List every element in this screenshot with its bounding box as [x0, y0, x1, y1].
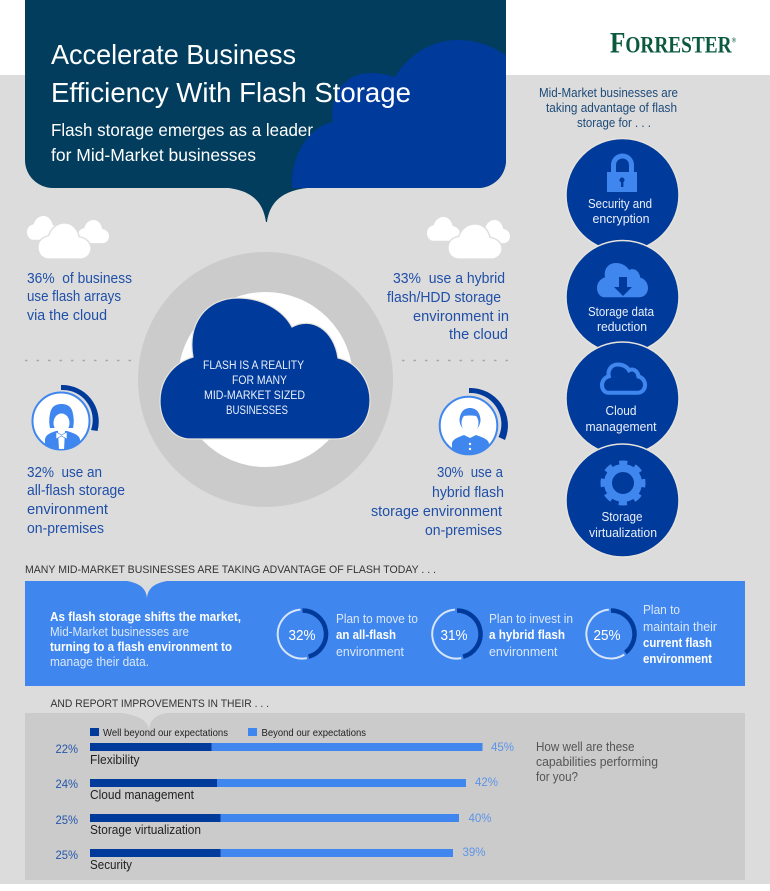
band lead text: manage their data.: [50, 655, 149, 669]
label: current flash: maintain their: [643, 620, 717, 634]
circle: storage data reduction: reduction: [597, 320, 647, 334]
circle: cloud management: Cloud: [606, 404, 637, 418]
title: Efficiency With Flash Storage: [51, 77, 411, 108]
icon: white clouds right: [427, 217, 510, 259]
bar: flexibility: 45%: [491, 740, 514, 754]
band lead text: turning to a flash environment to: [50, 640, 232, 654]
intro text: right column: [539, 86, 678, 130]
stat: 32% all-flash on premises: [27, 465, 125, 537]
central cloud: [160, 298, 370, 439]
label: current flash: Plan to: [643, 603, 680, 617]
Forrester logo: ®: [732, 36, 737, 44]
bar: cloud management: 24%: [56, 777, 78, 791]
ring 25%: [586, 610, 635, 659]
stat: 30% hybrid on premises: 30% use a: [437, 465, 504, 481]
band notch: [127, 581, 167, 598]
section heading: taking advantage: MANY MID-MARKET BUSINESSES ARE TAKING ADVANTAGE OF FLASH TODAY . . .: [25, 564, 436, 576]
ring 25%: 25%: [594, 628, 621, 644]
subtitle: [51, 120, 313, 165]
header background: [25, 0, 506, 188]
circle: storage virtualization: [566, 444, 679, 557]
bar: cloud management: [56, 775, 498, 802]
bar: flexibility: [56, 740, 514, 767]
stat: 33% hybrid in cloud: [387, 271, 509, 343]
bar: flexibility: 22%: [56, 742, 78, 756]
icon: white clouds left: [27, 216, 109, 259]
title: [51, 39, 411, 108]
icon: man avatar with arc: [440, 388, 508, 458]
header panel: [25, 0, 510, 222]
circle: security and encryption: Security and: [588, 197, 652, 211]
capability circles: [566, 138, 679, 557]
label: hybrid flash: [489, 612, 573, 659]
header speech pointer: [216, 187, 320, 222]
central cloud text: BUSINESSES: [226, 405, 288, 417]
chart legend: Well beyond our expectations: [103, 727, 228, 739]
label: all-flash: environment: [336, 645, 405, 659]
panel notch: [122, 713, 167, 730]
stat: 36% via cloud: 36% of business: [27, 271, 132, 287]
stat: 30% hybrid on premises: hybrid flash: [432, 485, 504, 501]
circle: cloud management: management: [586, 420, 657, 434]
stat: 33% hybrid in cloud: 33% use a hybrid: [393, 271, 505, 287]
label: current flash: environment: [643, 652, 713, 666]
central ring and cloud: [138, 252, 393, 507]
chart question: capabilities performing: [536, 755, 658, 769]
label: current flash: [643, 603, 717, 666]
stat: 32% all-flash on premises: all-flash storage: [27, 483, 125, 499]
Forrester logo: FORRESTER: [610, 26, 752, 60]
ring 31%: 31%: [440, 628, 468, 644]
stat: 33% hybrid in cloud: the cloud: [449, 327, 508, 343]
stat: 33% hybrid in cloud: flash/HDD storage: [387, 290, 501, 306]
stat: 30% hybrid on premises: [371, 465, 504, 539]
stat: 32% all-flash on premises: 32% use an: [27, 465, 102, 481]
chart question: for you?: [536, 770, 578, 784]
central cloud text: MID-MARKET SIZED: [204, 390, 305, 402]
title: Accelerate Business: [51, 39, 296, 70]
chart legend: [90, 727, 366, 739]
circle: storage virtualization: virtualization: [589, 526, 657, 540]
bar: security: Security: [90, 858, 133, 872]
stat: 32% all-flash on premises: environment: [27, 502, 108, 518]
ring 31%: [432, 610, 481, 659]
stat: 32% all-flash on premises: on-premises: [27, 521, 104, 537]
label: current flash: current flash: [643, 636, 712, 650]
circle: storage data reduction: [566, 240, 679, 354]
circle: security and encryption: encryption: [592, 212, 650, 226]
ring 32%: [278, 610, 326, 659]
central cloud text: [203, 360, 305, 417]
stat: 36% via cloud: use flash arrays: [27, 289, 121, 305]
icon: woman avatar with arc: [32, 385, 99, 452]
bar: flexibility: Flexibility: [90, 753, 140, 767]
blue band panel: [25, 581, 745, 686]
circle: storage virtualization: Storage: [602, 510, 643, 524]
chart question: How well are these: [536, 740, 635, 754]
header cloud: [292, 40, 510, 190]
label: all-flash: [336, 612, 418, 659]
chart legend: Beyond our expectations: [262, 727, 366, 739]
subtitle: Flash storage emerges as a leader: [51, 120, 313, 140]
label: hybrid flash: a hybrid flash: [489, 628, 565, 642]
stat: 30% hybrid on premises: on-premises: [425, 523, 502, 539]
bar: cloud management: Cloud management: [90, 788, 194, 802]
bar: security: 25%: [56, 848, 78, 862]
bar: storage virtualization: 40%: [468, 811, 492, 825]
band lead text: As flash storage shifts the market,: [50, 610, 241, 624]
intro text: right column: taking advantage of flash: [546, 101, 677, 115]
stat: 33% hybrid in cloud: environment in: [413, 309, 509, 325]
band lead text: [50, 610, 241, 669]
label: hybrid flash: environment: [489, 645, 558, 659]
label: all-flash: an all-flash: [336, 628, 396, 642]
circle: storage data reduction: Storage data: [588, 305, 654, 319]
intro text: right column: storage for . . .: [577, 116, 651, 130]
intro text: right column: Mid-Market businesses are: [539, 86, 678, 100]
circle: cloud management: [566, 342, 679, 455]
label: all-flash: Plan to move to: [336, 612, 418, 626]
circle: security and encryption: [566, 138, 679, 252]
bar: security: 39%: [462, 845, 486, 859]
stat: 36% via cloud: [27, 271, 132, 324]
bar: cloud management: 42%: [475, 775, 498, 789]
chart question: [536, 740, 658, 784]
subtitle: for Mid-Market businesses: [51, 145, 256, 165]
bar: security: [56, 845, 486, 872]
section heading: improvements: AND REPORT IMPROVEMENTS IN THEIR . . .: [50, 698, 269, 710]
stat: 36% via cloud: via the cloud: [27, 308, 107, 324]
bar: storage virtualization: [56, 811, 492, 837]
stat: 30% hybrid on premises: storage environment: [371, 504, 502, 520]
chart panel: [25, 713, 745, 880]
band lead text: Mid-Market businesses are: [50, 625, 189, 639]
label: hybrid flash: Plan to invest in: [489, 612, 573, 626]
central cloud text: FLASH IS A REALITY: [203, 360, 304, 372]
bar: storage virtualization: 25%: [56, 813, 78, 827]
central cloud text: FOR MANY: [232, 375, 287, 387]
ring 32%: 32%: [288, 628, 316, 644]
bar: storage virtualization: Storage virtualization: [90, 823, 201, 837]
